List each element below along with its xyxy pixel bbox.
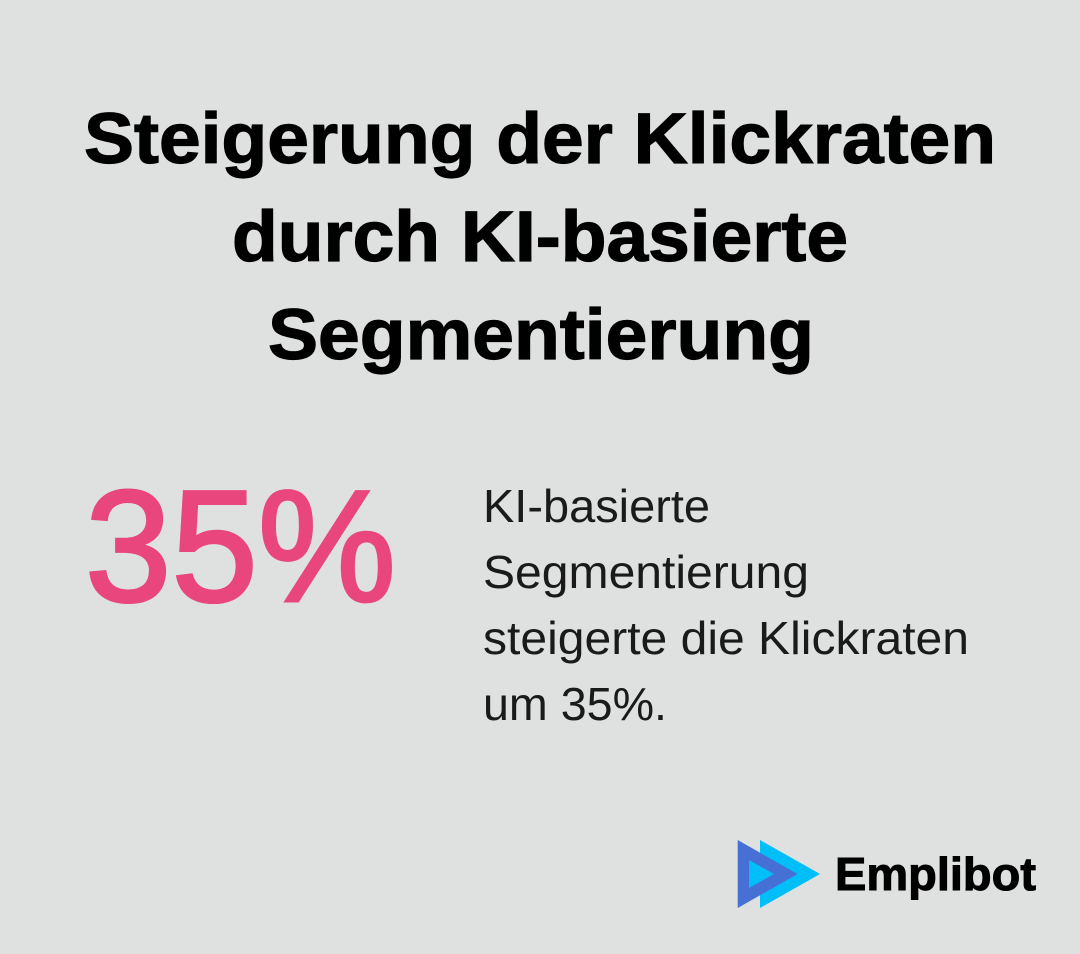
description text: steigerte die Klickraten xyxy=(483,612,969,664)
title: Segmentierung xyxy=(268,296,814,375)
title xyxy=(84,100,996,375)
logo: Emplibot xyxy=(738,840,1036,908)
description text: KI-basierte xyxy=(483,480,710,532)
description text xyxy=(483,480,969,730)
big stat: 35%: 35% xyxy=(85,457,396,635)
title: durch KI-basierte xyxy=(232,198,848,277)
description text: Segmentierung xyxy=(483,546,809,598)
title: Steigerung der Klickraten xyxy=(84,100,996,179)
logo wordmark: Emplibot xyxy=(835,848,1036,900)
description text: um 35%. xyxy=(483,678,667,730)
icon: play triangles xyxy=(738,840,820,908)
